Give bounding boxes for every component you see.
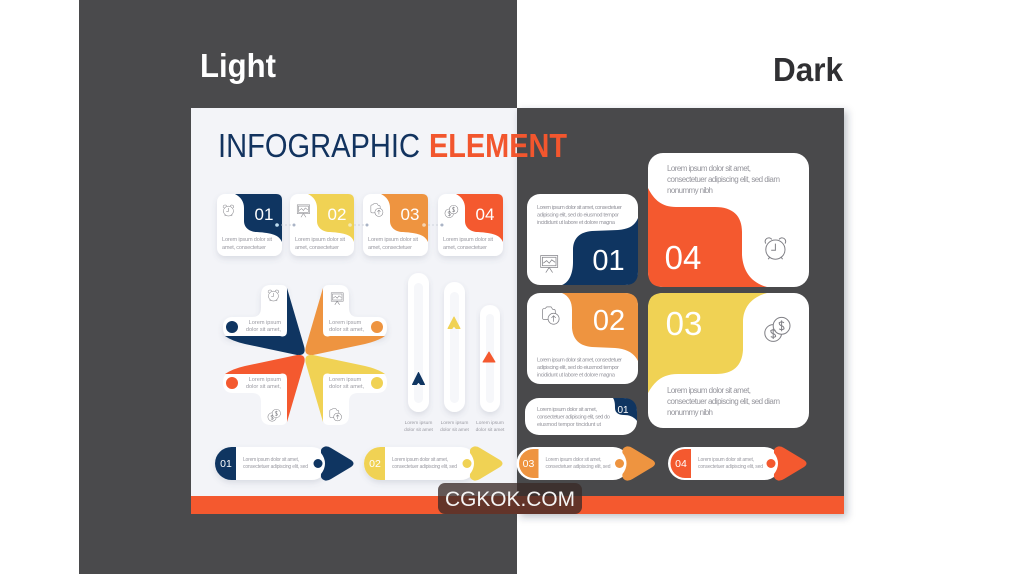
arrow pill 04 [668,446,806,481]
arrow pill 02: consectetuer adipiscing elit, sed [392,464,457,470]
slider 2 yellow [440,282,470,433]
panel: light poster [191,108,517,514]
title word: INFOGRAPHIC: INFOGRAPHIC [218,127,420,164]
card 04 red: consectetuer adipiscing elit, sed diam [667,175,780,184]
arrow pill 03: 03 [523,458,534,470]
panel: dark poster [517,108,844,514]
step card 03: 03 [401,205,419,224]
step card 04: Lorem ipsum dolor sit [443,237,493,243]
title word: ELEMENT: ELEMENT [429,127,567,164]
arrow pill 02: 02 [369,458,381,470]
arrow pill 01: consectetuer adipiscing elit, sed [243,464,308,470]
arrow pill 02: Lorem ipsum dolor sit amet, [392,457,448,463]
panel: dark backdrop for light version [79,0,517,574]
card 02 orange: 02 [593,305,625,337]
panel: four arrow pills [215,446,806,481]
slider 3 red: dolor sit amet [476,427,505,433]
title [218,127,567,164]
slider 1 navy [404,273,434,433]
heading: Light: Light [200,47,276,84]
arrow pill 04: Lorem ipsum dolor sit amet, [698,457,754,463]
step card 02: Lorem ipsum dolor sit [295,237,345,243]
arrow pill 03: consectetuer adipiscing elit, sed [546,464,611,470]
arrow pill 04: consectetuer adipiscing elit, sed [698,464,763,470]
chart: three vertical sliders [404,273,505,433]
panel: dark version cards [525,153,809,435]
step card 03 [363,194,428,256]
arrow pill 02 [364,446,502,481]
quadrant: yellow bottom right [305,355,387,425]
card small 01 navy: consectetuer adipiscing elit, sed do [537,414,610,420]
card small 01 navy [525,398,637,435]
watermark: CGKOK.COM [445,488,575,511]
quadrant: red bottom left [223,355,305,425]
step card 04 [438,194,503,256]
card 02 orange [527,293,638,384]
card 02 orange: adipiscing elit, sed do eiusmod tempor [537,365,619,371]
step card 01: Lorem ipsum dolor sit [222,237,272,243]
card 04 red: 04 [665,239,701,276]
slider 1 navy: Lorem ipsum [405,420,432,426]
card 03 yellow: consectetuer adipiscing elit, sed diam [667,397,780,406]
step card 03: Lorem ipsum dolor sit [368,237,418,243]
card 04 red [648,153,809,287]
slider 1 navy: dolor sit amet [404,427,434,433]
card small 01 navy: Lorem ipsum dolor sit amet, [537,407,597,413]
step card 02 [290,194,354,256]
card 01 navy: 01 [592,245,625,277]
quadrant: navy top left [223,285,305,355]
card 01 navy [527,194,638,285]
quadrant: red bottom left: Lorem ipsum [249,377,281,383]
heading: Dark: Dark [773,51,844,88]
card 02 orange: Lorem ipsum dolor sit amet, consectetuer [537,358,622,364]
quadrant: navy top left: dolor sit amet, [246,327,281,333]
step card 01: 01 [255,205,273,224]
card 03 yellow: nonummy nibh [667,408,713,417]
step card 04: 04 [476,205,494,224]
arrow pill 01: Lorem ipsum dolor sit amet, [243,457,299,463]
card 02 orange: incididunt ut labore et dolore magna [537,372,616,378]
quadrant: orange top right [305,285,387,355]
slider 3 red: Lorem ipsum [476,420,504,426]
footer bar [191,496,844,514]
arrow pill 01: 01 [220,458,232,470]
step card 03: amet, consectetuer [368,245,412,251]
step card 01: amet, consectetuer [222,245,266,251]
card 01 navy: adipiscing elit, sed do eiusmod tempor [537,212,619,218]
arrow pill 03 [516,446,655,481]
card 01 navy: incididunt ut labore et dolore magna [537,220,616,226]
quadrant: navy top left: Lorem ipsum [249,320,281,326]
slider 3 red [476,305,505,433]
step card 01 [217,194,282,256]
slider 2 yellow: dolor sit amet [440,427,470,433]
chart: four-blade star cross [223,285,387,425]
quadrant: yellow bottom right: dolor sit amet, [329,384,365,390]
watermark [438,483,582,514]
connector dots [275,223,444,227]
step card 02: 02 [328,205,346,224]
quadrant: orange top right: Lorem ipsum [329,320,362,326]
quadrant: yellow bottom right: Lorem ipsum [329,377,362,383]
card 04 red: nonummy nibh [667,186,713,195]
arrow pill 01 [215,446,354,481]
step card 02: amet, consectetuer [295,245,339,251]
slider 2 yellow: Lorem ipsum [441,420,468,426]
arrow pill 03: Lorem ipsum dolor sit amet, [546,457,602,463]
quadrant: orange top right: dolor sit amet, [329,327,365,333]
card small 01 navy: eiusmod tempor tincidunt ut [537,422,601,428]
quadrant: red bottom left: dolor sit amet, [246,384,281,390]
step card 04: amet, consectetuer [443,245,487,251]
card small 01 navy: 01 [617,405,629,416]
card 03 yellow [648,293,809,428]
card 03 yellow: Lorem ipsum dolor sit amet, [667,386,751,395]
card 03 yellow: 03 [666,305,702,342]
panel: four numbered step cards [217,194,503,256]
card 01 navy: Lorem ipsum dolor sit amet, consectetuer [537,205,622,211]
arrow pill 04: 04 [675,458,687,470]
card 04 red: Lorem ipsum dolor sit amet, [667,164,751,173]
